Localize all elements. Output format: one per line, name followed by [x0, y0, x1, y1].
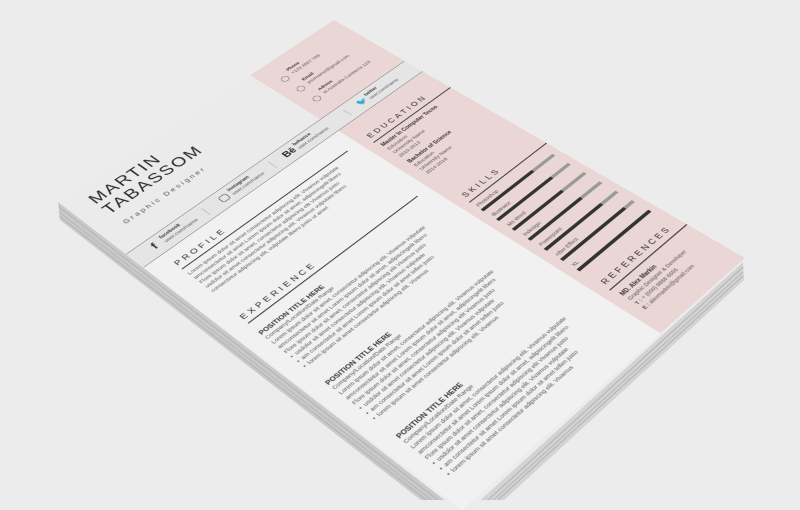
social band: user.com/name	[296, 126, 331, 150]
profile section: Lorem ipsum dolor sit amet consectetur adipiscing elit. Vivamus vulputate	[186, 166, 340, 276]
contact list: Phone	[285, 61, 301, 72]
education section: Education	[412, 151, 436, 167]
education section	[365, 87, 454, 175]
experience entries: • lorem ipsum sit amet consectetur adipiscing elit. Vivamus	[301, 268, 430, 369]
education section: 2010-2013	[397, 140, 422, 158]
job title: Graphic Designer	[121, 165, 208, 225]
education section: 2014-2018	[424, 157, 449, 175]
experience entries: POSITION TITLE HERE	[324, 331, 394, 386]
experience entries: POSITION TITLE HERE	[257, 284, 326, 336]
skills section: Indesign	[521, 221, 543, 237]
experience entries: POSITION TITLE HERE	[395, 382, 465, 440]
skills section: After Effect	[553, 237, 580, 257]
name: MARTIN	[84, 152, 166, 207]
profile section: PROFILE	[172, 226, 229, 267]
experience entries: • usdolor sit amet consectetur adipiscing elit. Vivamus vulputate	[430, 346, 571, 466]
experience entries: Lorem ipsum dolor sit amet, consectetur adipiscing elit. Vivamus vulputate	[409, 316, 568, 450]
experience entries: amconsectetur sit amet Lorem ipsum dolor sit amet, adipiscingelit libero	[416, 325, 571, 456]
social band	[126, 61, 423, 268]
profile section: Flore ipsum dolor sit amet, consectetur adipiscing elit Vivamus justo	[198, 181, 341, 285]
experience entries: • usdolor sit amet consectetur adipiscing elit. Vivamus vulputate	[357, 298, 497, 411]
references section: E : alexmarkin@gmail.com	[641, 263, 697, 311]
profile section: usdolor sit amet consectetur adipiscing elit. Vivamus vulputate libero	[204, 184, 348, 289]
social band: user.com/name	[163, 217, 200, 244]
education section: Bachelor of Science	[406, 130, 453, 164]
experience entries: amconsectetur sit amet Lorem ipsum dolor sit amet, adipiscingelit libero	[276, 233, 429, 350]
profile section: consectetur adipiscing elit, vulputate libero justo ut amet	[209, 206, 330, 293]
education section: University Name	[418, 145, 454, 171]
skills section	[459, 142, 652, 272]
education section: Education	[386, 134, 409, 151]
skills section: Illustrator	[490, 201, 513, 218]
experience entries: Lorem ipsum dolor sit amet, consectetur adipiscing elit. Vivamus vulputate	[337, 269, 496, 396]
experience entries: Company/Location/Date Range	[402, 383, 475, 445]
contact list: +123 4567 789	[290, 54, 322, 75]
experience entries: • am consectetur sit amet Lorem ipsum dolor sit amet tellen justo	[438, 349, 580, 472]
social band: twitter	[362, 86, 378, 97]
education section: EDUCATION	[365, 94, 430, 139]
experience entries: Flore ipsum dolor sit amet, consectetur adipiscing elit Vivamus justo	[350, 288, 497, 406]
social band: Bē	[280, 146, 299, 159]
experience entries	[257, 225, 580, 477]
skills section: Powerpoint	[537, 227, 564, 247]
experience entries: Company/Location/Date Range	[330, 333, 403, 391]
profile section: amconsectetur sit amet Lorem ipsum dolor sit amet, adipiscingelit libero	[192, 172, 343, 280]
experience entries: • lorem ipsum sit amet consectetur adipiscing elit. Vivamus	[371, 315, 501, 421]
social band: behance	[291, 132, 312, 146]
contact list: st Australia Canberra 123	[321, 60, 372, 94]
experience entries: Company/Location/Date Range	[264, 286, 336, 340]
experience heading	[237, 196, 418, 324]
pink column	[250, 20, 745, 333]
skills section: Photoshop	[475, 189, 500, 208]
references section: MD. Alex Markin	[619, 264, 659, 297]
references section: Graphic Designer & Developer	[626, 249, 688, 301]
experience entries: Flore ipsum dolor sit amet, consectetur adipiscing elit Vivamus justo	[282, 243, 428, 355]
skills section: XL	[570, 260, 581, 268]
social band: f	[148, 242, 161, 251]
references section	[598, 224, 697, 311]
social band: instagram	[226, 175, 250, 192]
contact list: Email	[300, 72, 315, 81]
contact list	[280, 54, 372, 102]
profile section	[172, 150, 348, 293]
social band: user.com/name	[368, 78, 400, 100]
experience heading: EXPERIENCE	[237, 260, 319, 321]
experience entries: • am consectetur sit amet Lorem ipsum dolor sit amet tellen justo	[364, 301, 506, 416]
social band: facebook	[158, 223, 182, 239]
experience entries: • usdolor sit amet consectetur adipiscing elit. Vivamus vulputate	[289, 252, 427, 359]
skills section: Ms Word	[506, 211, 528, 227]
social band: 🐦	[354, 96, 370, 107]
contact list: yourname@gmail.com	[305, 54, 351, 85]
experience entries: amconsectetur sit amet Lorem ipsum dolor sit amet, adipiscingelit libero	[344, 277, 498, 401]
experience entries: • am consectetur sit amet Lorem ipsum dolor sit amet tellen justo	[295, 255, 436, 364]
references section: T : + (000) 8888 6666	[633, 267, 680, 306]
name: TABASSOM	[98, 143, 207, 217]
references section: REFERENCES	[598, 224, 674, 286]
social band: user.com/name	[231, 171, 266, 196]
header background	[58, 75, 320, 254]
experience entries: Flore ipsum dolor sit amet, consectetur adipiscing elit Vivamus justo	[423, 336, 570, 461]
education section: University Name	[391, 129, 427, 154]
experience entries: Lorem ipsum dolor sit amet, consectetur adipiscing elit. Vivamus vulputate	[270, 225, 427, 345]
experience entries: • lorem ipsum sit amet consectetur adipiscing elit. Vivamus	[445, 365, 575, 477]
education section: Master In Computer Tecno	[380, 105, 439, 147]
contact list: Adress	[316, 79, 334, 91]
skills section: SKILLS	[459, 167, 503, 199]
